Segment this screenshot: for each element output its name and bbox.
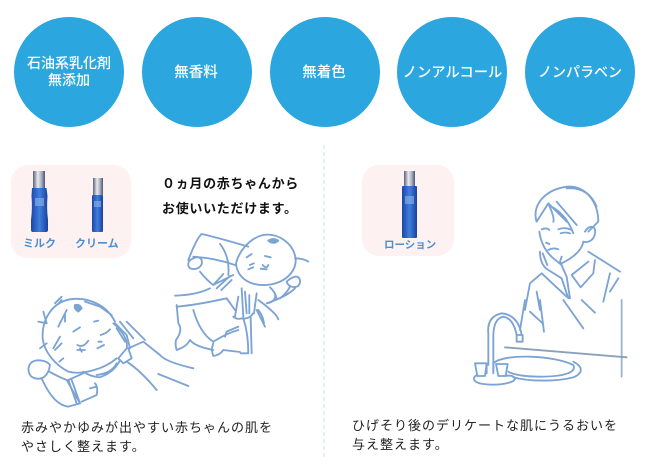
text: men's shaving description bbox=[352, 418, 618, 452]
heading: usable from newborn: お使いいただけます。 bbox=[162, 201, 298, 216]
label: ミルク: ミルク bbox=[23, 238, 56, 250]
heading: usable from newborn: ０ヵ月の赤ちゃんから bbox=[162, 176, 299, 191]
badge: 石油系乳化剤無添加 bbox=[14, 17, 124, 127]
badge: 無香料: 無香料 bbox=[174, 64, 218, 80]
text: baby description: 赤みやかゆみが出やすい赤ちゃんの肌を bbox=[21, 420, 273, 435]
badge: 無着色: 無着色 bbox=[302, 64, 346, 80]
text: men's shaving description: 与え整えます。 bbox=[352, 437, 449, 452]
label: ローション: ローション bbox=[384, 239, 436, 251]
illustration: baby face with hand bbox=[29, 297, 193, 407]
icon: milk bottle bbox=[31, 171, 48, 232]
badge: 石油系乳化剤無添加: 石油系乳化剤 bbox=[27, 55, 111, 71]
badge: ノンパラベン bbox=[525, 17, 635, 127]
panel: milk and cream products bbox=[11, 165, 131, 258]
text: men's shaving description: ひげそり後のデリケートな肌にうるおいを bbox=[352, 418, 618, 433]
badge: ノンアルコール: ノンアルコール bbox=[403, 64, 502, 80]
illustration: man touching chin at sink bbox=[525, 187, 620, 310]
badge: 石油系乳化剤無添加: 無添加 bbox=[48, 72, 90, 88]
badge: ノンアルコール bbox=[397, 17, 507, 127]
panel: lotion product bbox=[362, 165, 454, 256]
divider bbox=[323, 145, 325, 458]
badge: ノンパラベン: ノンパラベン bbox=[538, 64, 622, 80]
text: baby description: やさしく整えます。 bbox=[21, 439, 146, 454]
icon: cream bottle bbox=[92, 178, 103, 232]
badge: 無香料 bbox=[142, 17, 252, 127]
text: baby description bbox=[21, 420, 273, 454]
heading: usable from newborn bbox=[162, 176, 299, 216]
illustration: baby lying on back with hands bbox=[175, 234, 308, 356]
label: クリーム: クリーム bbox=[75, 238, 119, 250]
icon: lotion bottle bbox=[402, 171, 417, 238]
badge: 無着色 bbox=[270, 17, 380, 127]
